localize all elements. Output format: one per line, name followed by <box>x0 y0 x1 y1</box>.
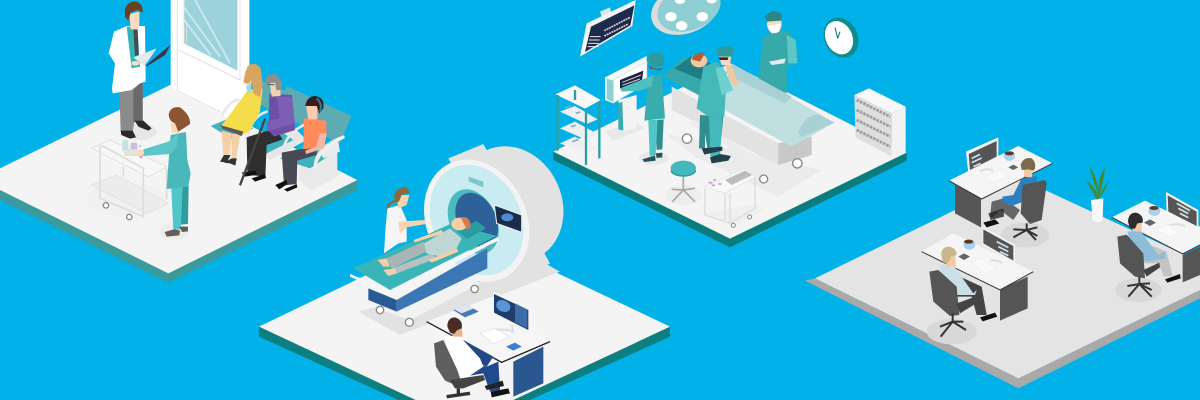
panel: office <box>805 137 1200 388</box>
panel: operating room <box>553 0 907 247</box>
office worker in light shirt <box>929 247 997 337</box>
wall monitor <box>580 0 636 57</box>
anesthetist <box>620 52 668 165</box>
door <box>171 0 249 133</box>
desk: back <box>949 137 1053 227</box>
nurse <box>136 107 191 240</box>
desk: right <box>1112 192 1200 282</box>
shelves <box>556 85 601 165</box>
seated older man in purple <box>240 74 295 185</box>
patient lying down <box>378 217 471 276</box>
panel: waiting room <box>0 0 357 283</box>
operator seated <box>434 317 510 397</box>
table shadow <box>665 133 822 197</box>
operator desk <box>427 292 550 397</box>
MRI scanner <box>405 129 582 299</box>
seated child with headphones <box>275 96 343 192</box>
operating table <box>662 53 834 183</box>
floor: MRI room <box>259 228 670 400</box>
surgical lamp <box>644 0 727 44</box>
floor: waiting room <box>0 85 357 283</box>
instrument cart <box>703 168 765 227</box>
desk: front <box>922 227 1033 321</box>
cabinet <box>854 88 906 157</box>
surgeon at table <box>697 46 740 163</box>
panel: MRI room <box>259 129 670 400</box>
office worker in blue <box>983 158 1047 240</box>
cart with bottles <box>87 140 168 220</box>
stool <box>665 161 702 205</box>
potted plant <box>1085 167 1108 223</box>
seated woman in yellow <box>220 64 263 166</box>
anesthesia machine <box>605 56 647 141</box>
chair shadows <box>927 222 1162 344</box>
technician standing <box>384 187 426 253</box>
office worker with dark hair <box>1117 213 1181 297</box>
floor: office <box>805 178 1200 388</box>
wall clock <box>817 12 865 63</box>
bench <box>211 80 352 191</box>
surgeon behind table <box>758 11 797 93</box>
doctor with laptop <box>109 1 171 140</box>
table and scanner shadow <box>358 263 560 335</box>
floor: operating room <box>553 63 907 247</box>
patient table <box>350 221 498 326</box>
